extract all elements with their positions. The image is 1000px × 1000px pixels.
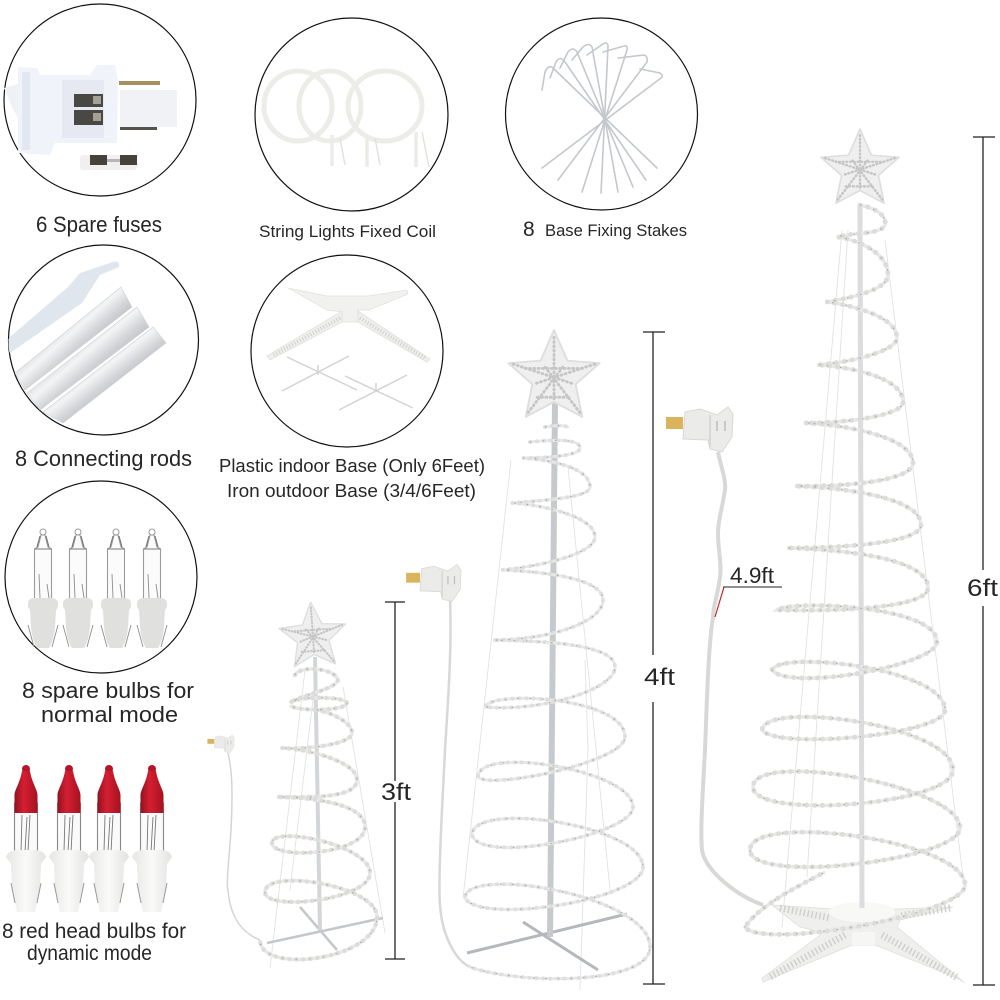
4ft power cord and plug xyxy=(406,565,470,967)
label: red head bulbs xyxy=(2,920,186,965)
6ft height marker: 6ft xyxy=(967,575,998,602)
4ft height marker xyxy=(643,332,675,984)
label: base types xyxy=(219,456,485,501)
plastic base xyxy=(762,902,965,983)
icon: red head bulbs xyxy=(6,765,172,912)
cord length callout xyxy=(715,563,782,617)
label: base types: Plastic indoor Base (Only 6Feet) xyxy=(219,456,485,476)
icon: string lights fixed coil circle xyxy=(255,18,448,211)
label: base fixing stakes: Base Fixing Stakes xyxy=(545,221,687,240)
label: spare bulbs: 8 spare bulbs for xyxy=(22,678,194,703)
3ft height marker xyxy=(381,602,411,959)
icon: spare clear bulbs circle xyxy=(5,481,197,673)
icon: base fixing stakes circle xyxy=(506,18,698,210)
label: base fixing stakes: 8 xyxy=(523,218,535,241)
3ft spiral tree xyxy=(260,600,385,968)
label: spare bulbs xyxy=(22,678,194,727)
4ft spiral tree xyxy=(463,330,650,990)
label: red head bulbs: 8 red head bulbs for xyxy=(2,920,186,943)
3ft power cord and plug xyxy=(207,735,260,940)
icon: plastic and iron base circle xyxy=(251,255,443,447)
label: red head bulbs: dynamic mode xyxy=(27,942,152,965)
cord length callout: 4.9ft xyxy=(730,563,774,588)
6ft height marker xyxy=(967,137,998,985)
icon: fuse plug circle xyxy=(4,4,196,196)
4ft height marker: 4ft xyxy=(644,664,675,691)
label: spare fuses: 6 Spare fuses xyxy=(36,212,162,237)
6ft spiral tree xyxy=(745,129,965,983)
6ft power cord and plug xyxy=(666,407,763,905)
icon: connecting rods circle xyxy=(4,245,198,435)
3ft height marker: 3ft xyxy=(381,779,411,806)
label: connecting rods: 8 Connecting rods xyxy=(15,446,192,471)
label: base types: Iron outdoor Base (3/4/6Feet) xyxy=(227,481,476,501)
label: spare bulbs: normal mode xyxy=(41,702,178,727)
label: string lights fixed coil: String Lights Fixed Coil xyxy=(259,222,436,241)
